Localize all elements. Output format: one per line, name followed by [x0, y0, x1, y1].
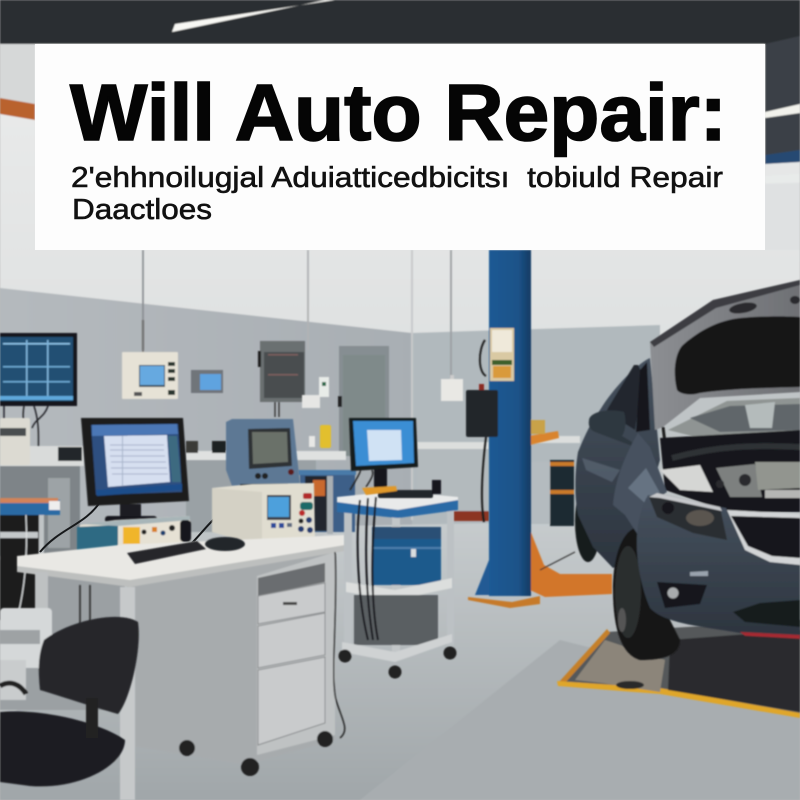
main computer monitor	[81, 418, 189, 523]
front tyre	[613, 527, 680, 660]
left storage shelf	[0, 498, 60, 620]
main title: Will Auto Repair:	[70, 68, 727, 157]
back cables	[40, 502, 228, 552]
subtitle	[71, 162, 723, 226]
subtitle: Daactloes	[72, 194, 212, 226]
floor pit with yellow line	[557, 620, 800, 718]
hood	[650, 280, 800, 430]
small wall display	[191, 370, 223, 393]
fog light recess	[657, 582, 707, 608]
wall controller box	[122, 320, 178, 399]
headlight	[649, 493, 727, 540]
office chair	[0, 608, 139, 786]
keyboard	[127, 541, 206, 564]
lift column with control box and arm	[466, 250, 612, 608]
grille	[727, 510, 800, 565]
trolley cart	[337, 491, 458, 678]
bumper	[637, 495, 800, 638]
wall switch and accessories	[302, 375, 463, 408]
CRT tester	[226, 419, 300, 487]
mirror	[589, 410, 632, 446]
beige tester unit	[212, 483, 315, 546]
gray wall panel	[258, 341, 305, 417]
lower vent	[733, 600, 800, 627]
blue control unit	[77, 516, 191, 560]
wall monitor	[0, 333, 77, 458]
fender	[613, 433, 667, 538]
door	[338, 346, 389, 456]
car side body	[575, 358, 660, 568]
back counter and cabinets	[0, 418, 580, 556]
car with open hood	[575, 280, 800, 660]
subtitle: 2'ehhnoilugjal Aduiatticedbicitsı tobiuld Repair	[71, 162, 723, 194]
mouse	[205, 537, 245, 551]
windshield	[668, 398, 800, 438]
rear wheel	[575, 482, 601, 562]
shelf behind CRT	[298, 470, 356, 534]
cart monitor	[349, 418, 441, 498]
title panel	[35, 44, 765, 250]
cowl and engine bay	[660, 430, 800, 512]
desk with drawers	[17, 535, 345, 800]
